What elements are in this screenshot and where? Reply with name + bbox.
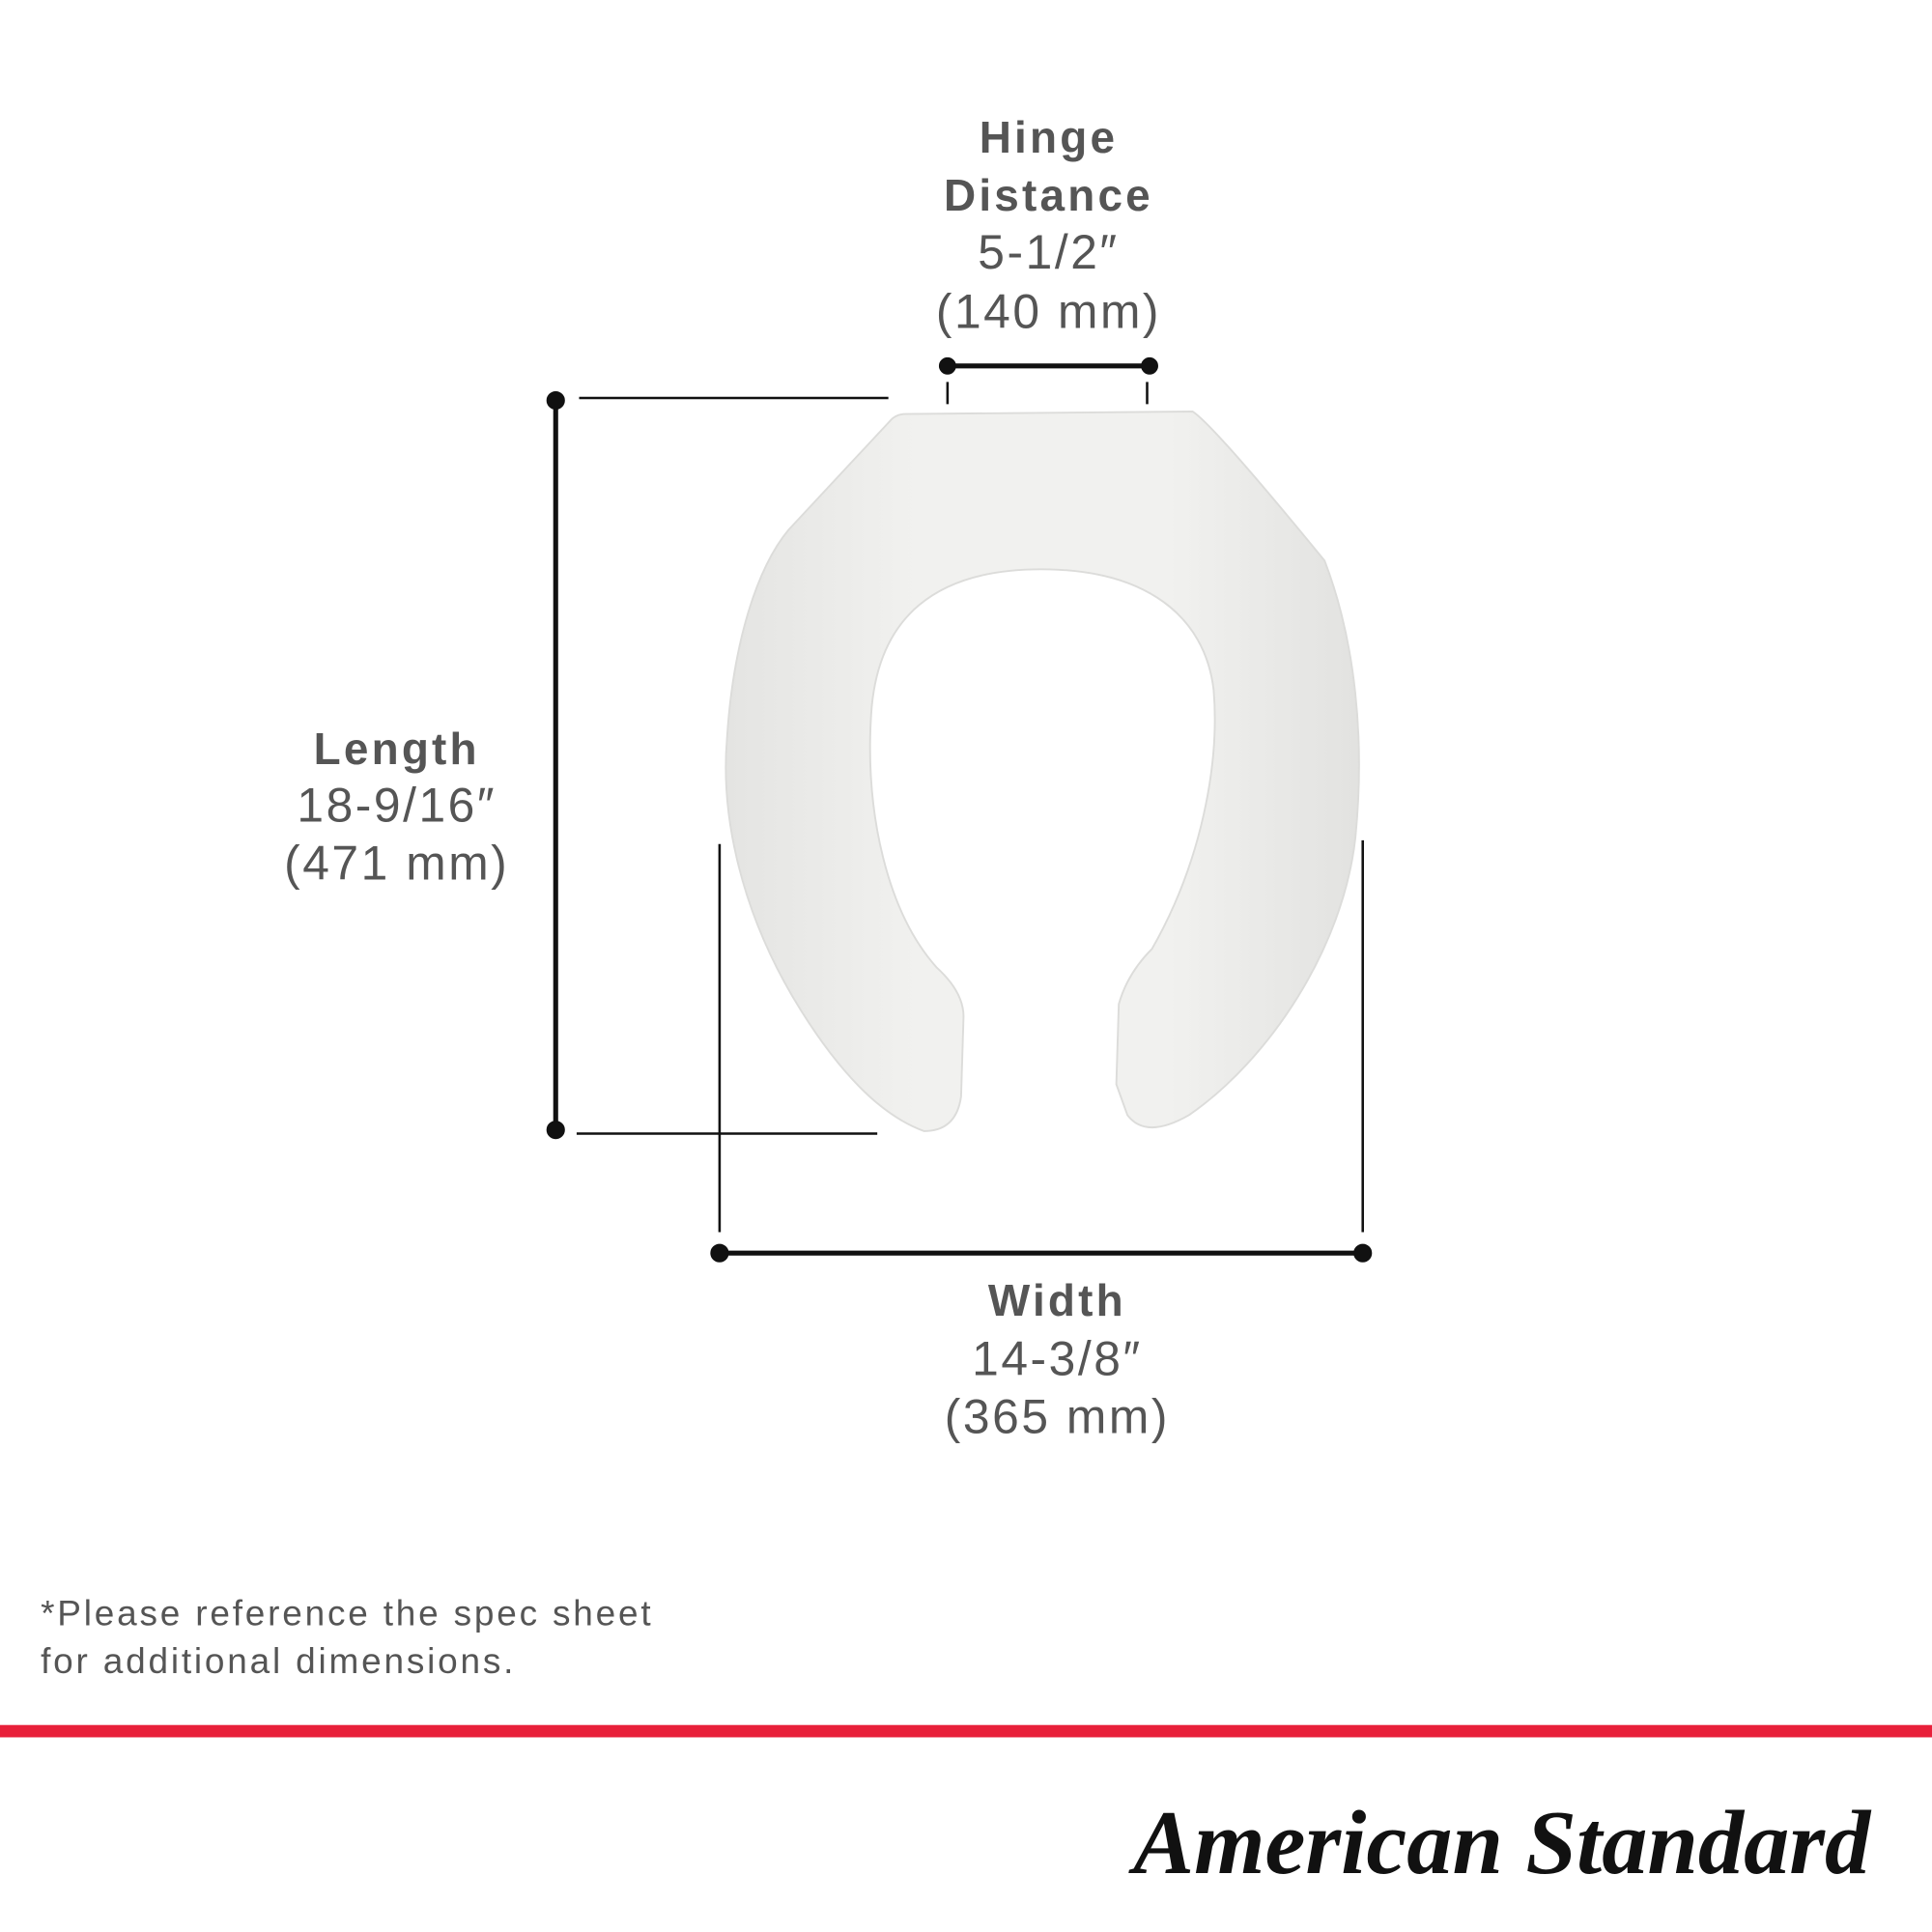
width dimension line <box>711 840 1372 1262</box>
footnote <box>41 1593 653 1681</box>
width label: Width <box>988 1275 1126 1325</box>
width label: (365 mm) <box>945 1389 1170 1443</box>
red divider <box>0 1725 1932 1737</box>
hinge distance label: (140 mm) <box>936 284 1161 338</box>
length label: 18-9/16″ <box>297 779 497 833</box>
hinge distance label <box>936 112 1161 338</box>
hinge dimension line <box>940 358 1157 404</box>
toilet seat <box>725 412 1359 1131</box>
length label: (471 mm) <box>284 837 509 891</box>
length label: Length <box>314 724 480 774</box>
logo: American Standard <box>1128 1793 1872 1893</box>
width label <box>945 1275 1170 1443</box>
length dimension line <box>547 392 889 1139</box>
hinge distance label: Distance <box>944 170 1153 220</box>
width label: 14-3/8″ <box>972 1331 1143 1385</box>
footnote: for additional dimensions. <box>41 1641 516 1681</box>
length label <box>284 724 509 891</box>
hinge distance label: Hinge <box>980 112 1118 162</box>
footnote: *Please reference the spec sheet <box>41 1593 653 1633</box>
hinge distance label: 5-1/2″ <box>978 225 1120 279</box>
